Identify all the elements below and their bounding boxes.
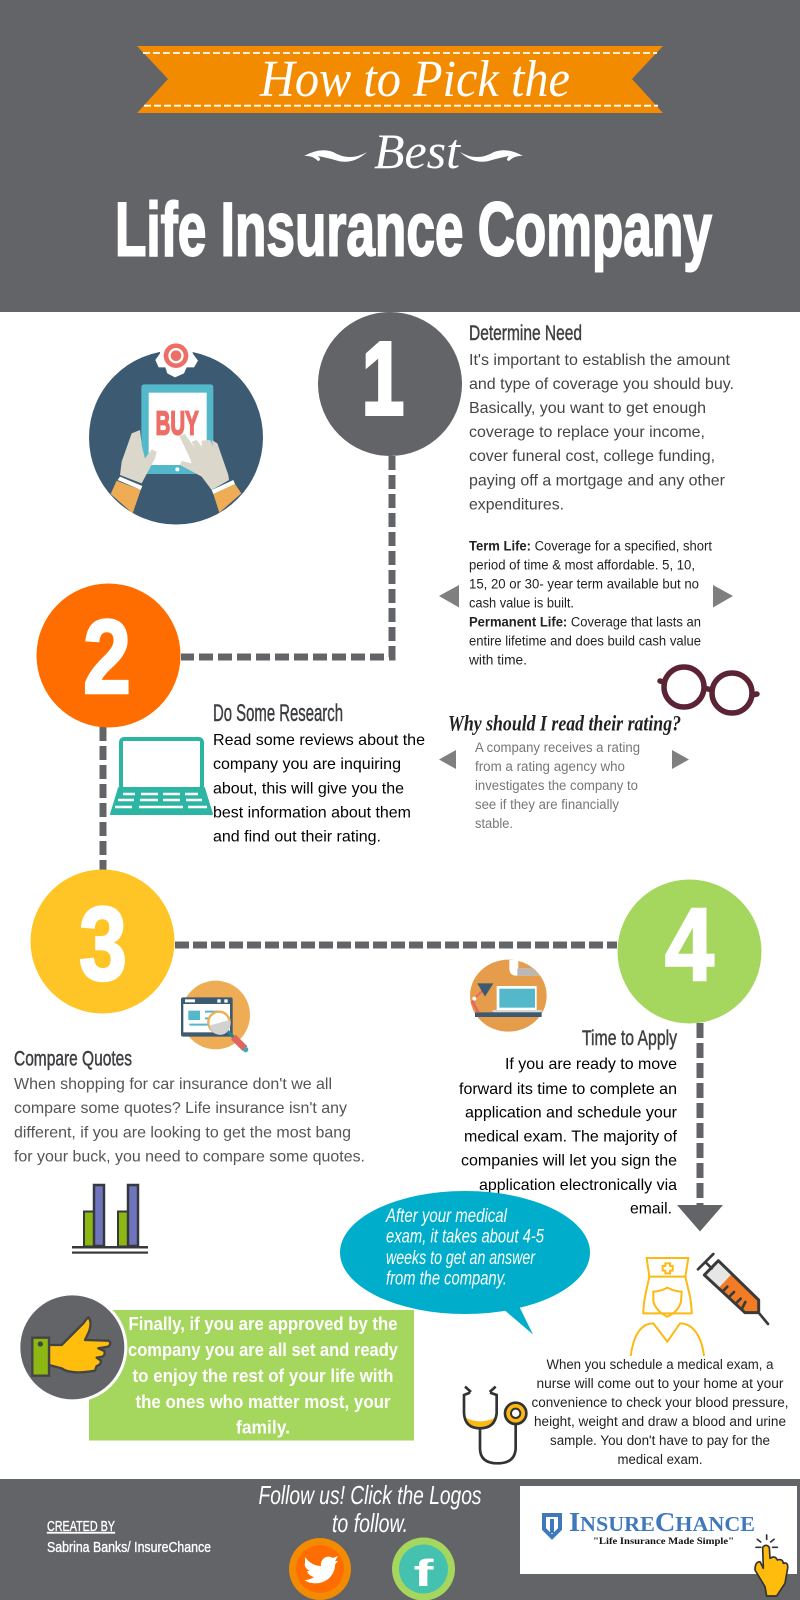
text block: medical exam details: sample. You don't have to pay for the (550, 1433, 770, 1448)
icon: twitter (289, 1538, 351, 1600)
icon: syringe (698, 1254, 768, 1324)
icon: stethoscope (464, 1387, 526, 1463)
heading: time to apply: Time to Apply (582, 1027, 677, 1050)
icon: hands on tablet buy: BUY (156, 405, 199, 442)
text block: time to apply body: forward its time to complete an (459, 1081, 677, 1098)
text block: final message: Finally, if you are approved by the (128, 1314, 398, 1334)
text block: medical exam details: convenience to check your blood pressure, (532, 1395, 788, 1410)
text block: life insurance types: Term Life: Coverage for a specified, short (469, 539, 712, 554)
text block: determine need body: expenditures. (469, 496, 564, 514)
footer panel (0, 1479, 800, 1600)
callout: speech bubble: exam, it takes about 4-5 (386, 1226, 544, 1248)
callout: speech bubble: weeks to get an answer (386, 1248, 535, 1269)
text block: determine need body: cover funeral cost, college funding, (469, 448, 715, 465)
callout: speech bubble: After your medical (385, 1206, 508, 1227)
heading: compare quotes: Compare Quotes (14, 1048, 132, 1070)
text block: research body: company you are inquiring (213, 756, 401, 773)
heading: why should I read their rating: Why should I read their rating? (448, 710, 681, 736)
step 4 badge: 4 (665, 887, 714, 1002)
panel: do some research (213, 700, 425, 846)
text block: time to apply body: email. (630, 1200, 672, 1218)
heading: follow us: to follow. (332, 1508, 408, 1538)
step 1 badge: 1 (362, 321, 404, 436)
text block: life insurance types (468, 539, 712, 667)
step 3 badge: 3 (79, 886, 127, 1003)
text block: research body: and find out their rating. (213, 829, 381, 846)
panel: time to apply (459, 1027, 678, 1218)
text block: medical exam details: nurse will come out to your home at your (536, 1376, 784, 1391)
text block: time to apply body (459, 1056, 678, 1218)
panel: determine need (469, 322, 734, 514)
icon: glasses (660, 667, 757, 713)
text block: final message (128, 1314, 398, 1438)
text block: final message: to enjoy the rest of your life with (132, 1366, 394, 1386)
text block: medical exam details: height, weight and draw a blood and urine (534, 1414, 786, 1429)
credit: CREATED BY (47, 1518, 115, 1535)
icon: thumbs up (17, 1292, 127, 1402)
text block: final message: family. (236, 1418, 290, 1438)
logo wordmark: INSURECHANCE (569, 1507, 755, 1537)
arrow: previous (439, 585, 459, 608)
icon: nurse (631, 1258, 704, 1356)
text block: compare quotes body: compare some quotes? Life insurance isn't any (14, 1100, 347, 1117)
text block: compare quotes body (14, 1076, 365, 1166)
arrow: next (672, 750, 689, 769)
text block: life insurance types: with time. (468, 652, 527, 667)
logo panel (520, 1486, 797, 1574)
icon: bar chart (72, 1185, 148, 1254)
text block: life insurance types: entire lifetime and does build cash value (469, 633, 701, 648)
panel: term and permanent life (439, 539, 733, 667)
subtitle: Best with swashes: Best (374, 123, 461, 179)
connector: step 2 to step 3 (100, 727, 106, 870)
text block: rating explanation (475, 740, 640, 831)
credit: Sabrina Banks/ InsureChance (47, 1539, 211, 1556)
text block: life insurance types: cash value is built. (469, 596, 574, 610)
text block: time to apply body: If you are ready to move (505, 1056, 677, 1073)
text block: rating explanation: stable. (475, 816, 513, 831)
text block: medical exam details: When you schedule a medical exam, a (546, 1357, 774, 1372)
text block: determine need body (469, 352, 734, 514)
text block: compare quotes body: for your buck, you need to compare some quotes. (14, 1149, 365, 1166)
step 1 badge (318, 312, 462, 456)
text block: research body (213, 732, 425, 846)
text block: research body: about, this will give you the (213, 780, 404, 797)
step 2 badge (36, 584, 180, 728)
text block: life insurance types: period of time & most affordable. 5, 10, (469, 558, 695, 573)
text block: medical exam details (532, 1357, 788, 1467)
step 4 badge (618, 880, 762, 1024)
text block: rating explanation: see if they are financially (475, 797, 619, 812)
text block: determine need body: and type of coverage you should buy. (469, 376, 734, 393)
text block: final message: the ones who matter most, your (136, 1392, 390, 1412)
text block: compare quotes body: different, if you are looking to get the most bang (14, 1124, 351, 1142)
panel: why read ratings (439, 710, 689, 831)
step 3 badge (30, 870, 174, 1014)
step 2 badge: 2 (83, 599, 131, 716)
text block: compare quotes body: When shopping for car insurance don't we all (14, 1076, 332, 1093)
text block: life insurance types: 15, 20 or 30- year term available but no (469, 576, 699, 592)
header panel (0, 0, 800, 312)
icon: facebook: f (414, 1553, 434, 1595)
text block: determine need body: coverage to replace your income, (469, 424, 705, 441)
text block: research body: best information about them (213, 804, 411, 822)
icon: hands on tablet buy (89, 343, 263, 524)
icon: laptop (111, 739, 212, 814)
connector: step 3 to step 4 (175, 942, 617, 948)
text block: determine need body: It's important to establish the amount (469, 352, 731, 369)
heading: do some research: Do Some Research (213, 700, 343, 727)
icon: facebook (392, 1538, 455, 1600)
ribbon banner (137, 46, 663, 113)
text block: rating explanation: investigates the company to (475, 778, 638, 793)
logo tagline: "Life Insurance Made Simple" (593, 1537, 734, 1547)
text block: time to apply body: companies will let you sign the (461, 1153, 677, 1170)
text block: rating explanation: from a rating agency who (475, 759, 625, 774)
arrow: next (713, 585, 733, 608)
text block: time to apply body: application electronically via (479, 1177, 677, 1194)
panel: compare quotes (14, 1048, 365, 1166)
heading: determine need: Determine Need (469, 322, 582, 345)
text block: medical exam details: medical exam. (618, 1452, 702, 1467)
arrow: step 4 down (677, 1023, 723, 1232)
heading: follow us (258, 1480, 482, 1538)
icon: pointing hand (755, 1535, 788, 1596)
text block: determine need body: Basically, you want to get enough (469, 400, 706, 417)
text block: final message: company you are all set and ready (128, 1340, 398, 1360)
text block: rating explanation: A company receives a rating (475, 740, 640, 755)
icon: desk with laptop and lamp (470, 960, 547, 1032)
text block: research body: Read some reviews about the (213, 732, 425, 749)
icon: shield logo (544, 1515, 560, 1537)
ribbon banner: How to Pick the (259, 51, 570, 108)
panel: final callout (89, 1310, 414, 1440)
callout: speech bubble (340, 1191, 590, 1334)
connector: step 1 to step 2 (181, 456, 392, 657)
heading: follow us: Follow us! Click the Logos (258, 1480, 482, 1510)
credit (47, 1518, 211, 1556)
subtitle: Best with swashes (304, 123, 523, 179)
icon: browser with magnifier (181, 981, 250, 1052)
text block: time to apply body: application and schedule your (465, 1104, 678, 1122)
icon: gear (155, 343, 198, 377)
text block: time to apply body: medical exam. The majority of (464, 1129, 678, 1146)
callout: speech bubble: from the company. (386, 1268, 507, 1290)
text block: life insurance types: Permanent Life: Coverage that lasts an (469, 614, 701, 630)
arrow: previous (439, 750, 456, 769)
text block: determine need body: paying off a mortgage and any other (469, 472, 726, 490)
